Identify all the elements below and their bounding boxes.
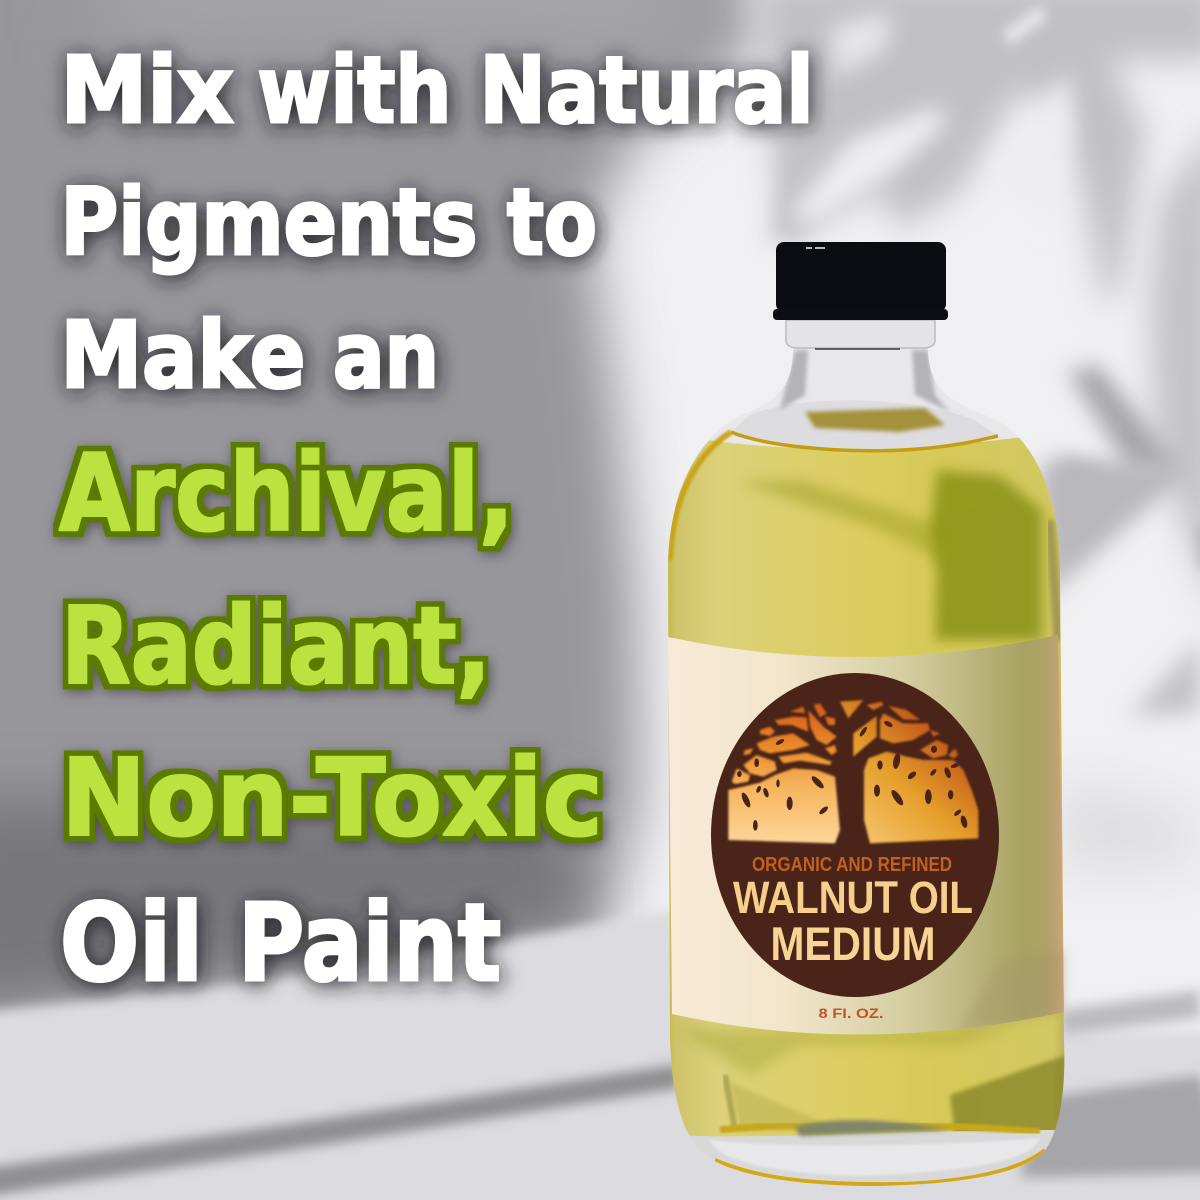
label xyxy=(668,635,1064,1035)
oil fill xyxy=(660,430,1070,1140)
logo text: walnut oil: WALNUT OIL xyxy=(733,872,973,923)
cap xyxy=(773,242,948,320)
oil meniscus line xyxy=(731,432,998,451)
glass base xyxy=(690,1130,1055,1182)
light gaps in leaves xyxy=(832,12,892,78)
neck shading xyxy=(780,350,950,412)
green line: radiant: Radiant, xyxy=(61,585,491,709)
white line: oil paint: Oil xyxy=(60,882,203,1006)
green line: archival: Archival, xyxy=(59,432,514,556)
glass body xyxy=(660,340,1070,1200)
lower oil shadows xyxy=(680,1030,1010,1075)
wall shadow lower right xyxy=(1060,780,1200,870)
white line: oil paint xyxy=(60,882,501,1006)
leaf shadow mass xyxy=(760,0,1200,300)
tree logo xyxy=(728,700,978,843)
shadow across oil xyxy=(930,470,1042,640)
leaves xyxy=(737,720,969,831)
oil rim glow xyxy=(670,432,731,560)
white line: mix with natural: Natural xyxy=(480,37,814,144)
left dark wall xyxy=(0,0,760,1040)
logo text: organic and refined: ORGANIC AND REFINED xyxy=(752,854,952,876)
white line: pigments to: Pigments xyxy=(60,169,478,276)
white line: make an: Make xyxy=(60,302,306,409)
floor xyxy=(0,905,1200,1200)
upper-left tone xyxy=(100,0,700,60)
right canopy xyxy=(840,700,978,843)
white line: make an: an xyxy=(333,302,439,409)
neck ring xyxy=(786,320,935,348)
headline xyxy=(59,37,814,1006)
reflected oil under shoulder xyxy=(805,408,945,432)
floor shadow band xyxy=(0,1064,680,1200)
logo text: medium: MEDIUM xyxy=(770,917,936,970)
bottle xyxy=(660,242,1070,1200)
glass shoulder highlights xyxy=(731,400,998,449)
streak behind cap xyxy=(770,120,835,240)
size text: 8 FI. OZ. xyxy=(818,1005,884,1021)
green line: non-toxic: Non-Toxic xyxy=(61,737,603,861)
white line: pigments to: to xyxy=(507,169,597,276)
white line: mix with natural xyxy=(60,37,814,144)
white line: mix with natural: with xyxy=(258,37,452,144)
white line: oil paint: Paint xyxy=(238,882,501,1006)
right floor shadow xyxy=(1020,1075,1200,1178)
left canopy xyxy=(728,703,840,843)
logo ellipse xyxy=(711,673,999,997)
white line: mix with natural: Mix xyxy=(60,37,234,144)
